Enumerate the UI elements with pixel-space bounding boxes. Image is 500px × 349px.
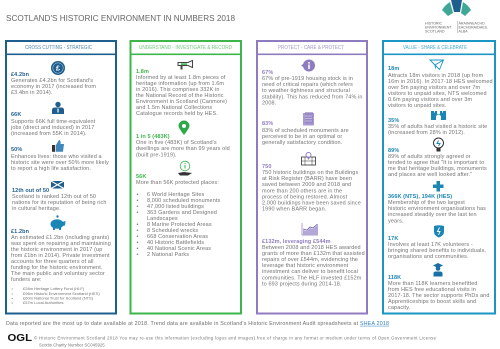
icon: info speech bubble <box>301 60 315 72</box>
stat: 67%: 67% of pre-1919 housing stock is in <box>262 76 353 82</box>
protected places list: • <box>136 234 139 240</box>
stat: 1 in 5: 1 in 5 (483K) <box>136 134 170 140</box>
stat: 1.2bn: £1.2bn <box>11 229 30 235</box>
stat: 12th out of 50: 12th out of 50 <box>12 188 49 194</box>
protected places list: • <box>136 222 139 228</box>
stat: 17K: organisations and communities. <box>388 254 469 260</box>
stat: 118K: capacity. <box>388 305 411 311</box>
funders list <box>12 286 100 305</box>
protected places list: 363 Gardens and Designed <box>147 210 217 216</box>
stat: 18m: 0.6m paying visitors and over 3m <box>388 97 473 103</box>
icon: plus <box>433 181 444 192</box>
panel: cross cutting - strategic <box>6 41 116 314</box>
stat: 18m: visitors to unpaid sites, NTS welcomed <box>388 91 487 97</box>
stat: 750: process of being restored. Almost <box>262 194 348 200</box>
stat: 4.2bn <box>11 72 96 96</box>
icon: light bulb <box>434 138 444 152</box>
stat: 1 in 5: One in five (483K) of Scotland's <box>136 140 217 146</box>
heading: understand: UNDERSTAND - INVESTIGATE & RECORD <box>139 45 232 51</box>
funders list: £57m Local Authorities <box>23 300 63 305</box>
stat: 4.2bn: Generates £4.2bn for Scotland's <box>11 78 93 84</box>
icon: document <box>303 112 314 126</box>
protected places list: 40 Historic Battlefields <box>147 240 204 246</box>
stat: 1.8m: Informed by at least 1.8m pieces of <box>136 75 226 81</box>
protected places list: • <box>136 192 139 198</box>
stat: 67%: 2008. <box>262 100 277 106</box>
stat: 750: more than 200 others are in the <box>262 188 342 194</box>
stat: 4.2bn: economy in 2017 (increased from <box>11 84 96 90</box>
logo: Historic Environment Scotland: ENVIRONMENT <box>425 25 452 29</box>
stat: 56K: More than 56K protected places: <box>136 180 219 186</box>
logo: Historic Environment Scotland: ALBA <box>458 30 468 34</box>
stat: 83%: 83% <box>262 121 273 127</box>
stat: 17K: bringing shared benefits to individuals, <box>388 248 486 254</box>
stat: 1.8m: heritage information (up from 1.6m <box>136 81 224 87</box>
stat: 89%: 89% of adults strongly agreed or <box>388 154 471 160</box>
icon: person <box>52 102 64 114</box>
stat: 17K: Involves at least 17K volunteers - <box>388 242 473 248</box>
stat: 66K: jobs (direct and induced) in 2017 <box>10 125 94 131</box>
funders list: £96m Historic Environment Scotland (HES) <box>23 291 100 296</box>
icon: paper plane <box>430 60 444 70</box>
stat: 89%: and places are well looked after." <box>388 172 472 178</box>
logo: Historic Environment Scotland: SCOTLAND <box>425 30 445 34</box>
icon: info over hand <box>178 161 192 176</box>
stat: 89%: 89% <box>388 148 399 154</box>
stat: 17K: 17K <box>388 236 398 242</box>
icon: shield <box>434 225 444 238</box>
stat: 118K: 118K <box>388 275 401 281</box>
protected places list: • <box>136 252 139 258</box>
stat: 1.8m: 1.8m <box>136 69 149 75</box>
stat: 118K: Apprenticeships to boost skills and <box>388 299 476 305</box>
icon: pound coin: £ <box>56 64 61 72</box>
icon: pound coin <box>51 61 65 75</box>
funders list: £28m Heritage Lottery Fund (HLF) <box>23 286 85 291</box>
icon: graduate <box>433 263 443 276</box>
stat: 18m: 18m <box>388 66 399 72</box>
stat: memberships: Membership of the two largest <box>388 200 465 206</box>
funders list: • <box>12 300 14 305</box>
copyright text <box>34 335 437 348</box>
stat: 1.2bn: funders are: <box>11 277 42 283</box>
heading: cross cutting: CROSS CUTTING - STRATEGIC <box>25 45 92 51</box>
funders list: • <box>12 291 14 296</box>
stat: 50%: Enhances lives: those who visited a <box>11 154 103 160</box>
stat: 35% <box>388 118 487 136</box>
protected places list: • <box>136 198 139 204</box>
stat: 1.2bn: accounts for three quarters of all <box>11 259 94 265</box>
stat: 132m: leverage that historic environment <box>262 263 349 269</box>
stat: 750: 1990 when BARR began. <box>262 206 327 212</box>
stat: 83%: 83% of scheduled monuments are <box>262 128 349 134</box>
heading: value: VALUE - SHARE & CELEBRATE <box>403 45 468 51</box>
stat: 1.2bn: funding for the historic environment. <box>11 265 103 271</box>
icon: piggy bank <box>50 215 66 230</box>
icon: megaphone <box>178 60 192 70</box>
stat: 750 <box>262 164 361 212</box>
stat: 83% <box>262 121 349 146</box>
stat: 132m: to 693 projects during 2014-18. <box>262 282 342 288</box>
logo: Historic Environment Scotland <box>425 0 488 34</box>
stat: 50% <box>11 147 109 172</box>
stat: 132m: Between 2008 and 2018 HES awarded <box>262 245 361 251</box>
stat: 1.2bn: An estimated £1.2bn (including grants) <box>11 235 109 241</box>
protected places list: • <box>136 246 139 252</box>
stat: 1.8m: Catalogue records held by HES. <box>136 111 218 117</box>
stat: 35%: 35% <box>388 118 399 124</box>
logo: Historic Environment Scotland: ÀRAINNEACHD <box>458 21 485 25</box>
stat: 35%: (increased from 28% in 2012). <box>388 130 465 136</box>
stat: 12th out of 50: Scotland is ranked 12th out of 50 <box>12 194 96 200</box>
stat: 50%: 50% <box>11 147 22 153</box>
panel: value - share and celebrate <box>383 41 495 314</box>
stat: 18m: visitors to unpaid sites. <box>388 103 447 109</box>
funders list: £60m National Trust for Scotland (NTS) <box>23 296 94 300</box>
stat: 1.8m: the National Record of the Historic <box>136 93 224 99</box>
stat: 1.2bn: from £1bn in 2014). Private investment <box>11 253 110 259</box>
stat: 1.8m: and 1.5m National Collections <box>136 105 212 111</box>
stat: 1 in 5: (built pre-1919). <box>136 152 177 158</box>
stat: 67%: to weather tightness and structural <box>262 88 350 94</box>
footer note: Data reported are the most up to date available at 2018. Trend data are available in Scotland's Historic Environment Audit spreadsheets at SHEA 2018 <box>6 321 389 327</box>
title: SCOTLAND'S HISTORIC ENVIRONMENT IN NUMBERS 2018 <box>6 13 235 23</box>
stat: 1 in 5: dwellings are more than 99 years old <box>136 146 230 152</box>
stat: 132m: communities. The HLF invested £152m <box>262 276 362 282</box>
stat: 89%: tended to agree that "It is important to <box>388 160 484 166</box>
protected places list <box>136 192 221 258</box>
stat: memberships: 366K (NTS), 194K (HES) <box>388 194 452 200</box>
stat: 66K <box>10 112 96 137</box>
protected places list: 47,000 listed buildings <box>147 204 204 210</box>
stat: 89%: me that heritage buildings, monuments <box>388 166 487 172</box>
funders list: • <box>12 296 14 300</box>
icon: saltire flag <box>51 181 64 188</box>
stat: memberships: increased steadily over the last ten <box>388 212 477 218</box>
panel: protect - care and protect <box>257 41 367 314</box>
stat: 132m: repairs of over £544m, evidencing the <box>262 257 358 263</box>
stat: 118K: More than 118K learners benefitted <box>388 281 478 287</box>
protected places list: • <box>136 204 139 210</box>
stat: 132m <box>262 239 365 288</box>
stat: 750: at Risk Register (BARR) have been <box>262 176 352 182</box>
stat: 35%: 35% of adults had visited a historic site <box>388 124 487 130</box>
stat: 18m: Attracts 18m visitors in 2018 (up from <box>388 73 484 79</box>
stat: 4.2bn: £3.4bn in 2014). <box>11 90 53 96</box>
stat: 18m <box>388 66 493 109</box>
stat: 56K <box>136 174 219 186</box>
stat: 18m: over 5m paying visitors and over 7m <box>388 85 481 91</box>
stat: 66K: 66K <box>11 112 21 118</box>
stat: 18m: 16m in 2016). In 2017-18 HES welcomed <box>388 79 493 85</box>
panel: understand - investigate and record <box>130 41 241 314</box>
protected places list: 40 National Scenic Areas <box>147 246 211 252</box>
stat: 1.8m: Environment in Scotland (Canmore) <box>136 99 227 105</box>
funders list: • <box>12 286 14 291</box>
stat: 66K: Supports 66K full time-equivalent <box>11 119 96 125</box>
stat: 12th out of 50 <box>12 188 107 212</box>
stat: 118K: from HES free educational visits in <box>388 287 476 293</box>
protected places list: 8 Scheduled wrecks <box>147 228 198 234</box>
icon: OGL logo: OGL <box>8 332 33 344</box>
stat: 66K: (increased from 55K in 2014). <box>11 131 87 137</box>
stat: 1 in 5 <box>136 134 230 158</box>
stat: 118K: 2017-18. The sector supports PhDs and <box>388 293 490 299</box>
stat: 132m: investment can deliver to benefit local <box>262 269 358 275</box>
logo: Historic Environment Scotland: EACHDRAIDHEIL <box>458 25 488 29</box>
stat: 17K <box>388 236 486 260</box>
protected places list: Landscapes <box>147 216 178 222</box>
stat: 83%: perceived to be in an optimal or <box>262 134 342 140</box>
stat: 1.8m: in 2016). This comprises 332K in <box>136 87 220 93</box>
protected places list: • <box>136 228 139 234</box>
icon: map with pin <box>302 152 316 165</box>
copyright text: Scottis Charity Number SC045925 <box>39 342 105 348</box>
stat: 1.8m <box>136 69 227 117</box>
stat: 12th out of 50: nations for its reputation of being rich <box>12 200 107 206</box>
stat: 1.2bn: the historic environment in 2017 (up <box>11 247 102 253</box>
protected places list: 668 Conservation Areas <box>147 234 208 240</box>
stat: 89% <box>388 148 487 178</box>
protected places list: 2 National Parks <box>147 252 189 258</box>
protected places list: • <box>136 240 139 246</box>
stat: 4.2bn: £4.2bn <box>11 72 30 78</box>
protected places list: 6 World Heritage Sites <box>147 192 204 198</box>
stat: 132m: £132m, leveraging £544m <box>262 239 331 245</box>
stat: 67% <box>262 70 363 106</box>
stat: 56K: 56K <box>136 174 146 180</box>
logo: Historic Environment Scotland: HISTORIC <box>425 21 443 25</box>
stat: memberships <box>388 194 486 224</box>
heading: protect: PROTECT - CARE & PROTECT <box>278 45 344 51</box>
stat: 1.2bn: The main public and voluntary sector <box>11 271 105 277</box>
protected places list: 8 Marine Protected Areas <box>147 222 212 228</box>
stat: 50%: to report a high life satisfaction. <box>11 166 91 172</box>
stat: 83%: generally satisfactory condition. <box>262 140 343 146</box>
stat: 1.2bn: was spent on repairing and maintaining <box>10 241 111 247</box>
protected places list: 8,000 scheduled monuments <box>147 198 221 204</box>
icon: rising bar chart <box>302 223 318 235</box>
stat: 750: 750 historic buildings on the Buildings <box>262 170 358 176</box>
stat: 67%: stability). This has reduced from 74% in <box>262 94 363 100</box>
stat: 132m: grants of more than £132m that assisted <box>262 251 365 257</box>
protected places list: • <box>136 210 139 216</box>
stat: 750: 2,000 buildings have been saved since <box>262 200 361 206</box>
icon: castle <box>431 111 446 120</box>
stat: 12th out of 50: in cultural heritage. <box>12 206 61 212</box>
icon: map pin <box>178 121 190 135</box>
icon: thumbs up <box>52 140 64 152</box>
stat: 67%: 67% <box>262 70 273 76</box>
stat: 50%: historic site were over 50% more likely <box>11 160 109 166</box>
stat: memberships: years. <box>388 218 404 224</box>
stat: 1.2bn <box>10 229 111 283</box>
stat: 67%: need of critical repairs (which refers <box>262 82 353 88</box>
stat: 750: saved between 2009 and 2018 and <box>262 182 351 188</box>
stat: 118K <box>388 275 490 311</box>
copyright text: © Historic Environment Scotland 2018 You may re-use this information (excluding logos and images) free of charge in any format or medium under terms of Open Government License <box>34 335 437 340</box>
stat: 750: 750 <box>262 164 271 170</box>
stat: memberships: historic environment organisations has <box>388 206 486 212</box>
